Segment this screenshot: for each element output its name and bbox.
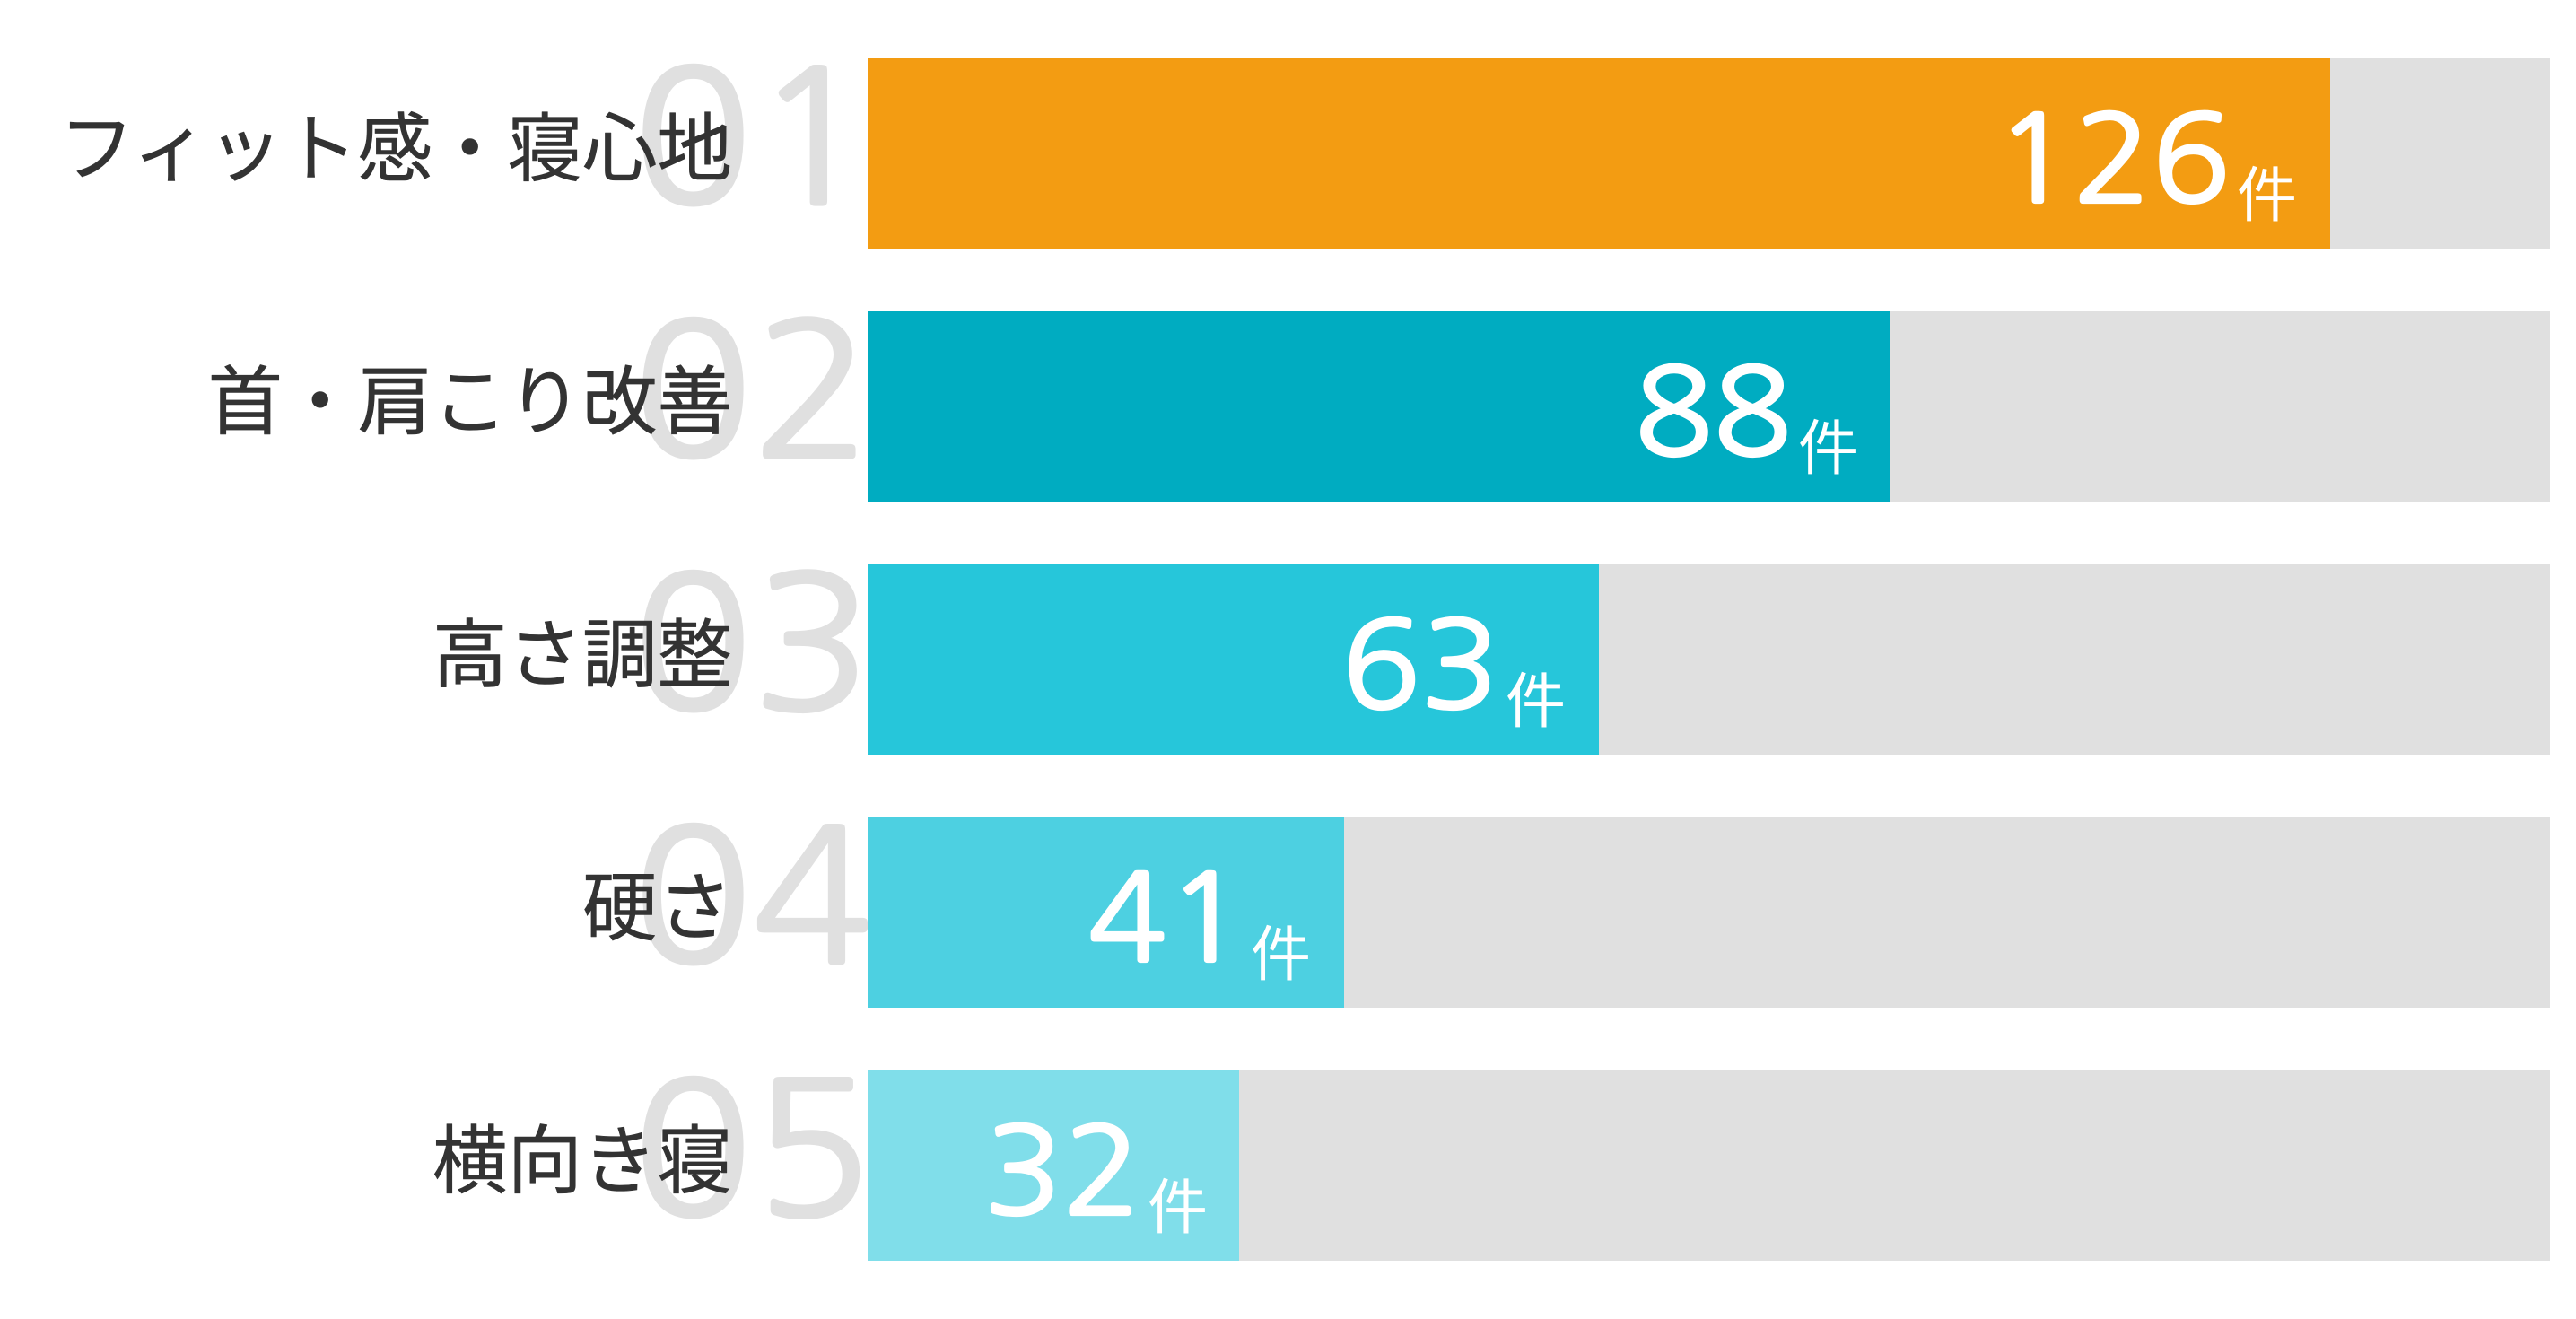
- value 63: 63: [1342, 607, 1499, 726]
- track 05: [868, 1070, 2550, 1261]
- track 04: [868, 817, 2550, 1008]
- value 88: 88: [1635, 354, 1792, 473]
- label 04: 硬さ: [582, 866, 732, 950]
- rank number 04: 04: [633, 804, 872, 990]
- label 02: 首・肩こり改善: [208, 360, 732, 444]
- row 01: fit and comfort: [59, 45, 2550, 249]
- track 03: [868, 564, 2550, 755]
- unit 02: 件: [1798, 415, 1858, 483]
- unit 01: 件: [2237, 162, 2297, 230]
- bar 01: [868, 58, 2330, 249]
- row 04: firmness: [582, 804, 2550, 1008]
- label 05: 横向き寝: [432, 1119, 732, 1203]
- rank number 05: 05: [633, 1057, 872, 1243]
- row 02: neck and shoulder relief: [208, 298, 2550, 502]
- value 126: 126: [1995, 100, 2231, 220]
- label 01: フィット感・寝心地: [59, 107, 732, 191]
- value 32: 32: [984, 1113, 1141, 1232]
- unit 04: 件: [1251, 922, 1311, 989]
- row 05: side sleeping: [432, 1057, 2550, 1261]
- unit 05: 件: [1148, 1175, 1208, 1242]
- track 02: [868, 311, 2550, 502]
- rank number 02: 02: [633, 298, 872, 484]
- value 41: 41: [1088, 860, 1245, 979]
- bar 02: [868, 311, 1890, 502]
- bar 05: [868, 1070, 1239, 1261]
- row 03: height adjustment: [432, 551, 2550, 755]
- rank number 03: 03: [633, 551, 872, 737]
- label 03: 高さ調整: [432, 613, 732, 697]
- bar 04: [868, 817, 1344, 1008]
- track 01: [868, 58, 2550, 249]
- unit 03: 件: [1506, 668, 1566, 736]
- bar 03: [868, 564, 1599, 755]
- rank number 01: 01: [633, 45, 872, 231]
